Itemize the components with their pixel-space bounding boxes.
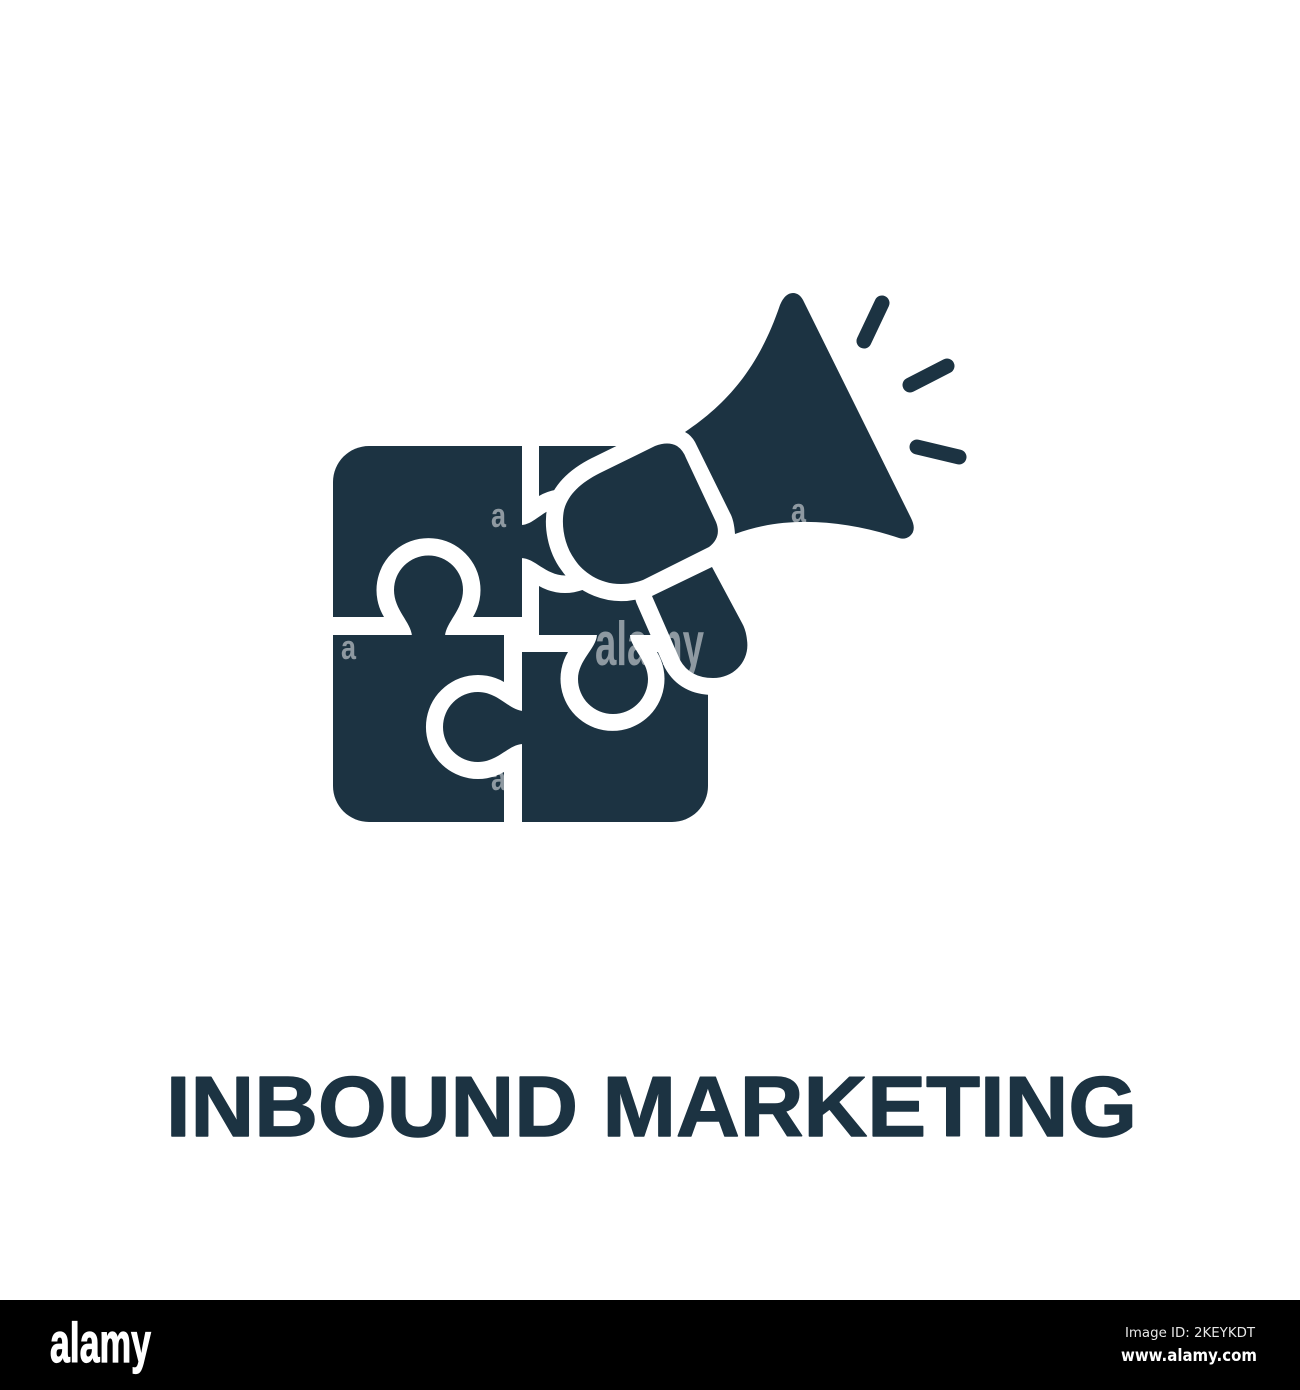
footer logo: alamy: [50, 1311, 151, 1374]
megaphone horn: [685, 293, 914, 539]
watermarks: a: [491, 497, 507, 535]
watermarks: alamy: [595, 610, 704, 679]
title: INBOUND MARKETING: [166, 1060, 1137, 1155]
megaphone handle: [652, 567, 747, 678]
icon: puzzle: [328, 440, 714, 827]
icon: sound rays: [864, 303, 959, 457]
website: www.alamy.com: [1121, 1346, 1257, 1365]
watermarks: a: [491, 760, 507, 798]
watermarks: a: [341, 629, 357, 667]
icon: megaphone: [563, 293, 914, 678]
megaphone body: [563, 444, 718, 584]
icon: puzzle and megaphone: [328, 293, 959, 827]
image id: Image ID: 2KEYKDT: [1125, 1325, 1256, 1341]
watermarks: [341, 492, 807, 798]
footer bar: [0, 1300, 1300, 1390]
watermarks: a: [791, 492, 807, 530]
